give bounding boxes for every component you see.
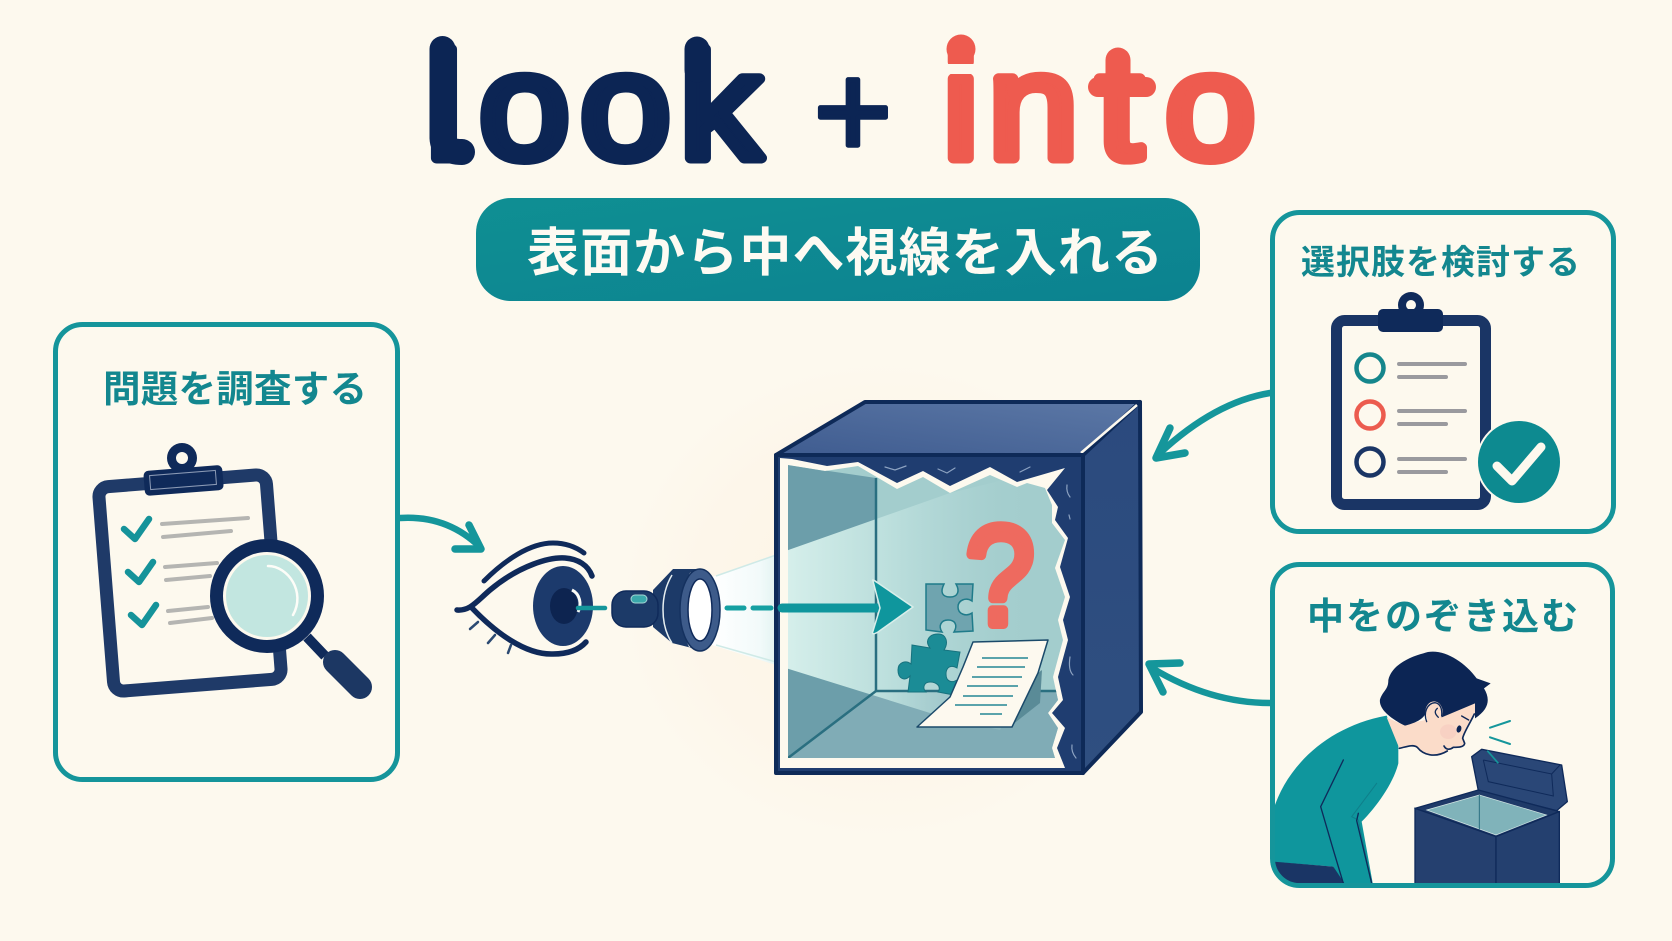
icon: options clipboard [1336, 292, 1486, 504]
3D box [774, 400, 1143, 776]
icon: flashlight [612, 569, 720, 651]
light beam [712, 470, 1052, 713]
beam inside box [788, 491, 1001, 730]
sheet of paper [917, 640, 1048, 727]
person head [1380, 652, 1510, 755]
title plus sign: + [814, 37, 892, 186]
box right face [1083, 402, 1141, 773]
panel: investigate a problem [56, 324, 398, 780]
motion lines [1490, 721, 1510, 744]
icon: check badge [1476, 419, 1562, 505]
panel heading: investigate: 問題を調査する [103, 368, 367, 410]
puzzle piece upper [926, 584, 973, 632]
icon: magnifying glass [216, 546, 360, 687]
panel: consider options [1272, 212, 1614, 532]
title word: look: look [426, 23, 762, 191]
panel heading: consider options: 選択肢を検討する [1301, 244, 1580, 282]
question mark: ? [966, 498, 1034, 654]
small open box [1415, 749, 1567, 887]
box top face [776, 402, 1140, 455]
arrow: peek to box [1149, 663, 1270, 703]
torn opening edge [780, 458, 1070, 768]
arrow: gaze into box [727, 580, 913, 634]
title: look + into [426, 23, 1255, 191]
panel border [1272, 564, 1612, 886]
box front frame [776, 455, 1083, 773]
person body [1275, 716, 1398, 883]
panel: peek inside [1263, 564, 1612, 887]
illustration: person peeking into box [1263, 652, 1567, 887]
title word: into: into [943, 23, 1255, 191]
panel heading: peek inside: 中をのぞき込む [1307, 596, 1578, 637]
icon: clipboard with checklist [98, 443, 282, 692]
arrow: panel to eye [400, 518, 481, 549]
arrow: options to box [1156, 393, 1270, 458]
box interior [788, 465, 1065, 758]
puzzle piece lower [898, 634, 960, 695]
icon: eye [457, 543, 605, 654]
subtitle pill [476, 198, 1200, 301]
subtitle pill: 表面から中へ視線を入れる [527, 225, 1163, 283]
box inner edges [788, 478, 1070, 758]
